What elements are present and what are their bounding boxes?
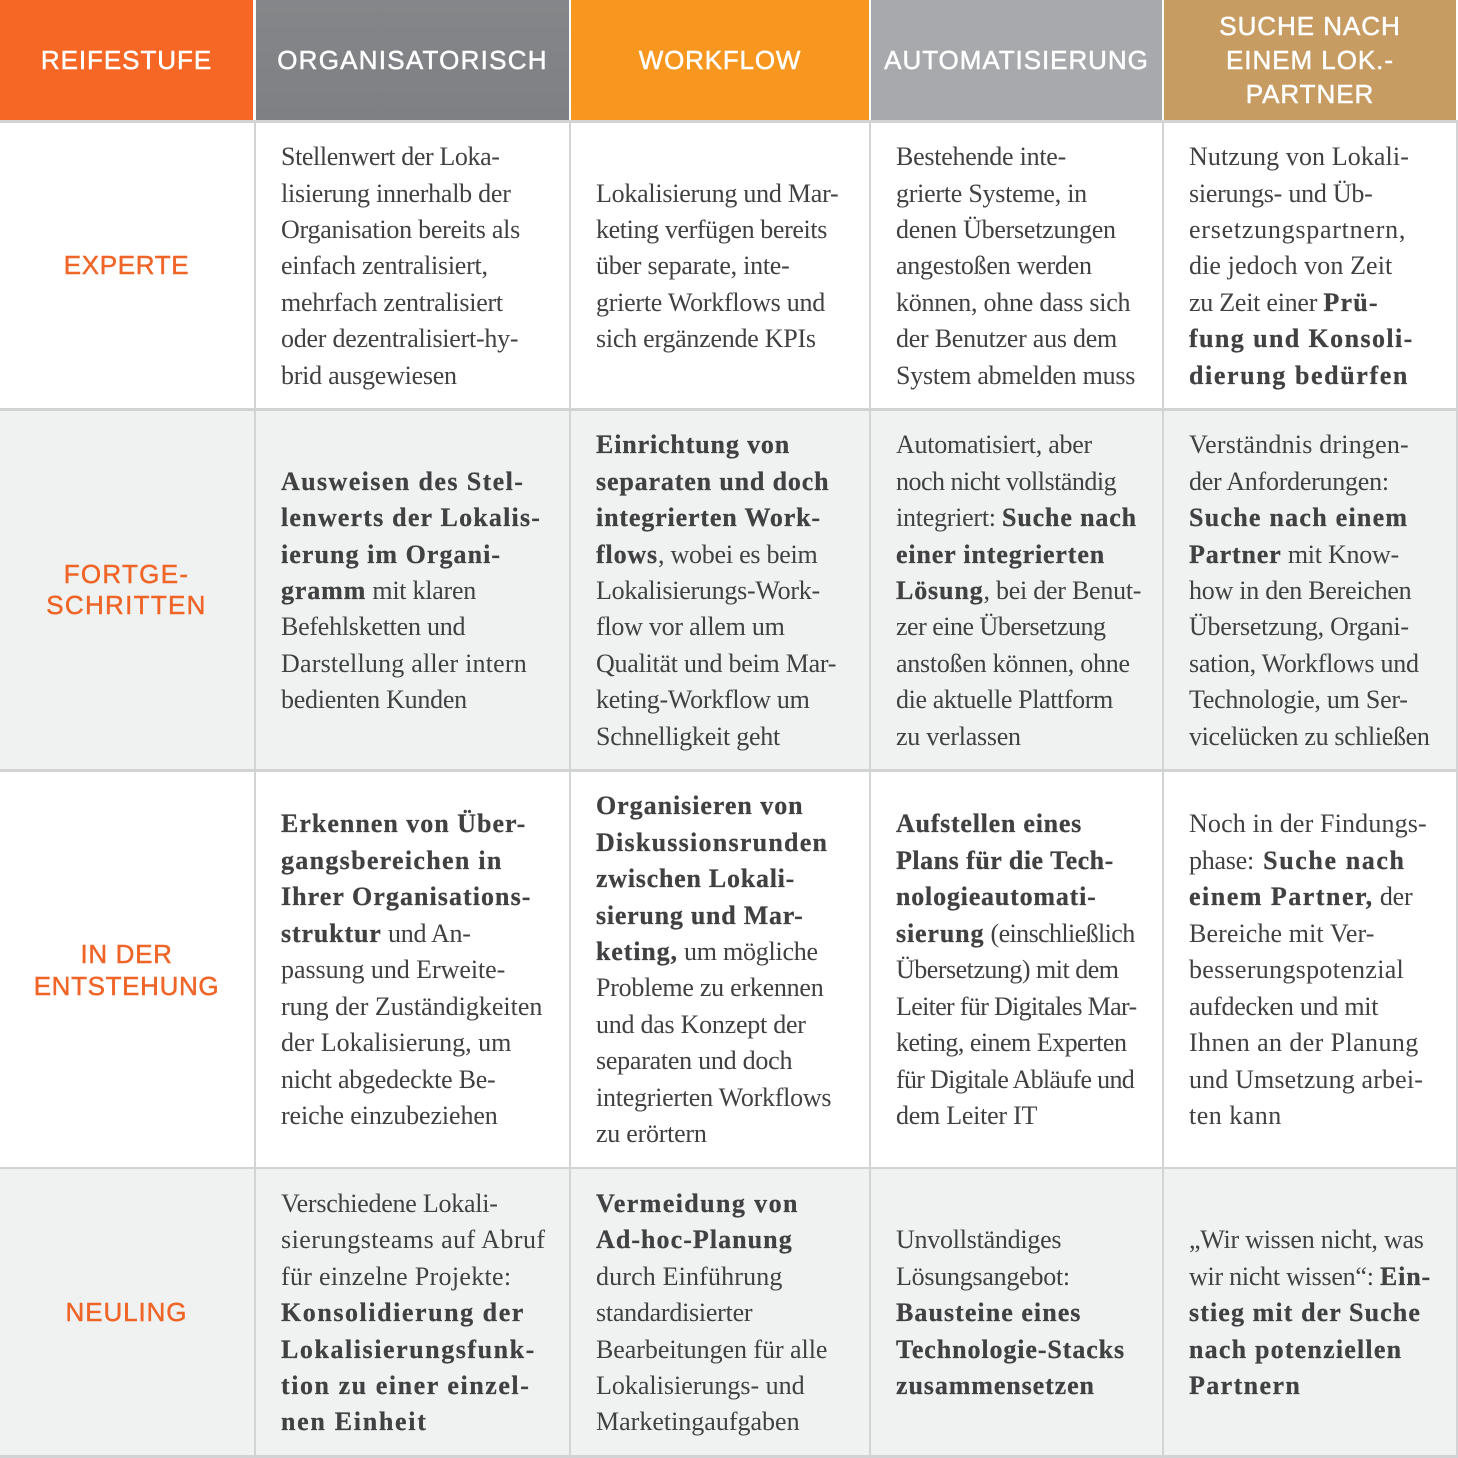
cell: In der Entstehung / Partner: aufdecken und mit: [1189, 992, 1378, 1021]
cell: Neuling / Partner: [1189, 1225, 1431, 1400]
row label: Fortgeschritten: SCHRITTEN: [46, 590, 207, 620]
cell: Neuling / Partner: Partnern: [1189, 1371, 1301, 1400]
cell: Experte / Partner: [1189, 142, 1414, 390]
cell: Experte / Partner: dierung bedürfen: [1189, 361, 1409, 390]
cell: Fortgeschritten / Automatisierung: integriert: Suche nach: [896, 503, 1137, 532]
cell: Fortgeschritten / Workflow: integrierten Work-: [596, 503, 821, 532]
cell: In der Entstehung / Organisatorisch: Erkennen von Über-: [281, 809, 526, 838]
cell: Fortgeschritten / Workflow: [596, 430, 836, 751]
cell: Fortgeschritten / Partner: Verständnis dringen-: [1189, 430, 1409, 459]
cell: Experte / Organisatorisch: Organisation bereits als: [281, 215, 520, 244]
cell: Fortgeschritten / Automatisierung: [896, 430, 1141, 751]
cell: Neuling / Organisatorisch: [281, 1189, 546, 1436]
cell: Experte / Automatisierung: Bestehende inte-: [896, 142, 1066, 171]
cell: Experte / Organisatorisch: einfach zentralisiert,: [281, 251, 488, 280]
cell: In der Entstehung / Automatisierung: für Digitale Abläufe und: [896, 1065, 1134, 1094]
cell: Fortgeschritten / Partner: sation, Workflows und: [1189, 649, 1419, 678]
cell: Neuling / Partner: „Wir wissen nicht, was: [1189, 1225, 1424, 1254]
cell: Neuling / Automatisierung: Unvollständiges: [896, 1225, 1061, 1254]
cell: Experte / Workflow: keting verfügen bereits: [596, 215, 827, 244]
row background: Neuling: [0, 1168, 1458, 1455]
cell: Fortgeschritten / Workflow: flows, wobei es beim: [596, 540, 817, 569]
cell: In der Entstehung / Organisatorisch: reiche einzubeziehen: [281, 1101, 498, 1130]
cell: Neuling / Organisatorisch: für einzelne Projekte:: [281, 1262, 511, 1291]
header: Suche nach einem Lok.-Partner: [1164, 0, 1456, 120]
cell: Neuling / Automatisierung: zusammensetzen: [896, 1371, 1095, 1400]
cell: Experte / Workflow: grierte Workflows und: [596, 288, 825, 317]
cell: Fortgeschritten / Workflow: Lokalisierungs-Work-: [596, 576, 820, 605]
header: Automatisierung: [871, 0, 1162, 120]
cell: Fortgeschritten / Organisatorisch: gramm mit klaren: [281, 576, 476, 605]
cell: Neuling / Workflow: Vermeidung von: [596, 1189, 799, 1218]
cell: In der Entstehung / Partner: [1189, 809, 1427, 1130]
cell: In der Entstehung / Workflow: separaten und doch: [596, 1046, 792, 1075]
cell: Experte / Organisatorisch: mehrfach zentralisiert: [281, 288, 503, 317]
cell: Fortgeschritten / Partner: Suche nach einem: [1189, 503, 1408, 532]
cell: Fortgeschritten / Partner: der Anforderungen:: [1189, 467, 1389, 496]
cell: Neuling / Partner: nach potenziellen: [1189, 1335, 1402, 1364]
cell: In der Entstehung / Workflow: Organisieren von: [596, 791, 804, 820]
cell: Fortgeschritten / Organisatorisch: bedienten Kunden: [281, 685, 467, 714]
cell: Fortgeschritten / Automatisierung: Automatisiert, aber: [896, 430, 1092, 459]
cell: In der Entstehung / Automatisierung: keting, einem Experten: [896, 1028, 1126, 1057]
cell: Fortgeschritten / Automatisierung: anstoßen können, ohne: [896, 649, 1130, 678]
cell: Fortgeschritten / Organisatorisch: [281, 467, 541, 714]
cell: Experte / Organisatorisch: lisierung innerhalb der: [281, 179, 511, 208]
row label: In der Entstehung: [34, 939, 219, 1001]
cell: Fortgeschritten / Organisatorisch: lenwerts der Lokalis-: [281, 503, 541, 532]
cell: In der Entstehung / Organisatorisch: der Lokalisierung, um: [281, 1028, 511, 1057]
header: Reifestufe: [0, 0, 253, 120]
cell: Fortgeschritten / Partner: Technologie, um Ser-: [1189, 685, 1408, 714]
cell: Experte / Workflow: [596, 179, 838, 353]
cell: In der Entstehung / Automatisierung: Plans für die Tech-: [896, 846, 1114, 875]
cell: Fortgeschritten / Automatisierung: einer integrierten: [896, 540, 1105, 569]
header: Workflow: WORKFLOW: [639, 45, 801, 75]
cell: Neuling / Partner: wir nicht wissen“: Ein-: [1189, 1262, 1431, 1291]
cell: In der Entstehung / Organisatorisch: gangsbereichen in: [281, 846, 503, 875]
cell: In der Entstehung / Organisatorisch: nicht abgedeckte Be-: [281, 1065, 495, 1094]
cell: Neuling / Partner: stieg mit der Suche: [1189, 1298, 1421, 1327]
cell: In der Entstehung / Partner: Noch in der Findungs-: [1189, 809, 1427, 838]
header: Suche nach einem Lok.-Partner: SUCHE NACH: [1219, 11, 1401, 41]
cell: Experte / Automatisierung: können, ohne dass sich: [896, 288, 1130, 317]
cell: Experte / Partner: fung und Konsoli-: [1189, 324, 1414, 353]
cell: Experte / Automatisierung: grierte Systeme, in: [896, 179, 1087, 208]
cell: In der Entstehung / Automatisierung: Aufstellen eines: [896, 809, 1082, 838]
cell: In der Entstehung / Partner: ten kann: [1189, 1101, 1282, 1130]
cell: In der Entstehung / Automatisierung: Übersetzung) mit dem: [896, 955, 1118, 984]
cell: Neuling / Organisatorisch: Lokalisierungsfunk-: [281, 1335, 536, 1364]
cell: Neuling / Automatisierung: Lösungsangebot:: [896, 1262, 1070, 1291]
cell: In der Entstehung / Automatisierung: [896, 809, 1136, 1130]
cell: In der Entstehung / Partner: phase: Suche nach: [1189, 846, 1406, 875]
row background: Fortgeschritten: [0, 410, 1458, 770]
cell: In der Entstehung / Partner: besserungspotenzial: [1189, 955, 1404, 984]
header: Organisatorisch: ORGANISATORISCH: [277, 45, 548, 75]
cell: In der Entstehung / Partner: Ihnen an der Planung: [1189, 1028, 1419, 1057]
cell: Experte / Automatisierung: der Benutzer aus dem: [896, 324, 1117, 353]
header: Organisatorisch: [256, 0, 569, 120]
cell: Fortgeschritten / Workflow: flow vor allem um: [596, 612, 785, 641]
cell: Experte / Organisatorisch: brid ausgewiesen: [281, 361, 457, 390]
row label: Neuling: NEULING: [66, 1297, 187, 1327]
cell: Experte / Automatisierung: angestoßen werden: [896, 251, 1092, 280]
cell: Neuling / Workflow: Bearbeitungen für alle: [596, 1335, 827, 1364]
header: Suche nach einem Lok.-Partner: PARTNER: [1246, 79, 1374, 109]
cell: Experte / Workflow: über separate, inte-: [596, 251, 790, 280]
row label: Fortgeschritten: FORTGE-: [64, 559, 189, 589]
cell: In der Entstehung / Workflow: sierung und Mar-: [596, 901, 804, 930]
cell: In der Entstehung / Partner: einem Partner, der: [1189, 882, 1412, 911]
cell: In der Entstehung / Workflow: zwischen Lokali-: [596, 864, 795, 893]
cell: Experte / Organisatorisch: oder dezentralisiert-hy-: [281, 324, 518, 353]
cell: Experte / Organisatorisch: [281, 142, 520, 390]
cell: Neuling / Workflow: Lokalisierungs- und: [596, 1371, 805, 1400]
cell: In der Entstehung / Workflow: Diskussionsrunden: [596, 828, 828, 857]
cell: Fortgeschritten / Workflow: Schnelligkeit geht: [596, 722, 780, 751]
cell: Fortgeschritten / Partner: vicelücken zu schließen: [1189, 722, 1430, 751]
cell: In der Entstehung / Organisatorisch: struktur und An-: [281, 919, 471, 948]
cell: In der Entstehung / Organisatorisch: [281, 809, 542, 1130]
row label: In der Entstehung: ENTSTEHUNG: [34, 971, 219, 1001]
row label: In der Entstehung: IN DER: [80, 939, 173, 969]
cell: Neuling / Organisatorisch: Verschiedene Lokali-: [281, 1189, 498, 1218]
cell: In der Entstehung / Workflow: zu erörtern: [596, 1119, 707, 1148]
cell: Fortgeschritten / Organisatorisch: Ausweisen des Stel-: [281, 467, 524, 496]
cell: In der Entstehung / Partner: und Umsetzung arbei-: [1189, 1065, 1423, 1094]
cell: Neuling / Automatisierung: [896, 1225, 1125, 1400]
cell: Experte / Organisatorisch: Stellenwert der Loka-: [281, 142, 500, 171]
cell: Experte / Partner: Nutzung von Lokali-: [1189, 142, 1409, 171]
cell: Neuling / Organisatorisch: tion zu einer einzel-: [281, 1371, 530, 1400]
cell: Neuling / Automatisierung: Technologie-Stacks: [896, 1335, 1125, 1364]
cell: Neuling / Workflow: standardisierter: [596, 1298, 752, 1327]
cell: In der Entstehung / Partner: Bereiche mit Ver-: [1189, 919, 1375, 948]
cell: Fortgeschritten / Partner: Partner mit Know-: [1189, 540, 1399, 569]
cell: In der Entstehung / Workflow: und das Konzept der: [596, 1010, 806, 1039]
cell: In der Entstehung / Organisatorisch: rung der Zuständigkeiten: [281, 992, 542, 1021]
cell: Experte / Partner: die jedoch von Zeit: [1189, 251, 1392, 280]
cell: In der Entstehung / Organisatorisch: passung und Erweite-: [281, 955, 505, 984]
cell: Fortgeschritten / Automatisierung: Lösung, bei der Benut-: [896, 576, 1141, 605]
cell: Fortgeschritten / Partner: [1189, 430, 1430, 751]
cell: Fortgeschritten / Organisatorisch: ierung im Organi-: [281, 540, 501, 569]
cell: Experte / Automatisierung: System abmelden muss: [896, 361, 1135, 390]
cell: Experte / Workflow: Lokalisierung und Mar-: [596, 179, 838, 208]
cell: In der Entstehung / Workflow: Probleme zu erkennen: [596, 973, 823, 1002]
cell: Experte / Partner: sierungs- und Üb-: [1189, 179, 1373, 208]
cell: In der Entstehung / Organisatorisch: Ihrer Organisations-: [281, 882, 531, 911]
header: Reifestufe: REIFESTUFE: [41, 45, 212, 75]
cell: In der Entstehung / Workflow: keting, um mögliche: [596, 937, 818, 966]
row label: Experte: EXPERTE: [64, 250, 189, 280]
header: Automatisierung: AUTOMATISIERUNG: [884, 45, 1149, 75]
cell: Experte / Automatisierung: denen Übersetzungen: [896, 215, 1116, 244]
cell: Neuling / Workflow: [596, 1189, 827, 1436]
cell: Neuling / Workflow: durch Einführung: [596, 1262, 783, 1291]
cell: Fortgeschritten / Automatisierung: die aktuelle Plattform: [896, 685, 1113, 714]
cell: Fortgeschritten / Workflow: keting-Workflow um: [596, 685, 810, 714]
cell: Fortgeschritten / Partner: Übersetzung, Organi-: [1189, 612, 1409, 641]
header: Suche nach einem Lok.-Partner: EINEM LOK.-: [1226, 45, 1394, 75]
cell: Fortgeschritten / Workflow: Qualität und beim Mar-: [596, 649, 836, 678]
cell: Fortgeschritten / Automatisierung: noch nicht vollständig: [896, 467, 1116, 496]
header: Workflow: [571, 0, 869, 120]
cell: In der Entstehung / Automatisierung: dem Leiter IT: [896, 1101, 1037, 1130]
cell: Neuling / Automatisierung: Bausteine eines: [896, 1298, 1081, 1327]
cell: Neuling / Organisatorisch: sierungsteams auf Abruf: [281, 1225, 546, 1254]
cell: Experte / Automatisierung: [896, 142, 1135, 390]
cell: In der Entstehung / Workflow: [596, 791, 831, 1148]
cell: Fortgeschritten / Automatisierung: zu verlassen: [896, 722, 1021, 751]
cell: In der Entstehung / Automatisierung: Leiter für Digitales Mar-: [896, 992, 1136, 1021]
cell: Fortgeschritten / Workflow: Einrichtung von: [596, 430, 790, 459]
cell: Neuling / Organisatorisch: nen Einheit: [281, 1407, 428, 1436]
cell: Neuling / Workflow: Marketingaufgaben: [596, 1407, 800, 1436]
cell: Experte / Partner: zu Zeit einer Prü-: [1189, 288, 1379, 317]
cell: Experte / Workflow: sich ergänzende KPIs: [596, 324, 816, 353]
cell: Fortgeschritten / Organisatorisch: Befehlsketten und: [281, 612, 465, 641]
cell: Experte / Partner: ersetzungspartnern,: [1189, 215, 1406, 244]
cell: In der Entstehung / Automatisierung: nologieautomati-: [896, 882, 1097, 911]
cell: In der Entstehung / Workflow: integrierten Workflows: [596, 1083, 831, 1112]
cell: In der Entstehung / Automatisierung: sierung (einschließlich: [896, 919, 1135, 948]
cell: Neuling / Workflow: Ad-hoc-Planung: [596, 1225, 793, 1254]
cell: Fortgeschritten / Partner: how in den Bereichen: [1189, 576, 1411, 605]
cell: Neuling / Organisatorisch: Konsolidierung der: [281, 1298, 525, 1327]
row label: Fortgeschritten: [46, 559, 207, 620]
cell: Fortgeschritten / Organisatorisch: Darstellung aller intern: [281, 649, 527, 678]
cell: Fortgeschritten / Automatisierung: zer eine Übersetzung: [896, 612, 1105, 641]
cell: Fortgeschritten / Workflow: separaten und doch: [596, 467, 829, 496]
